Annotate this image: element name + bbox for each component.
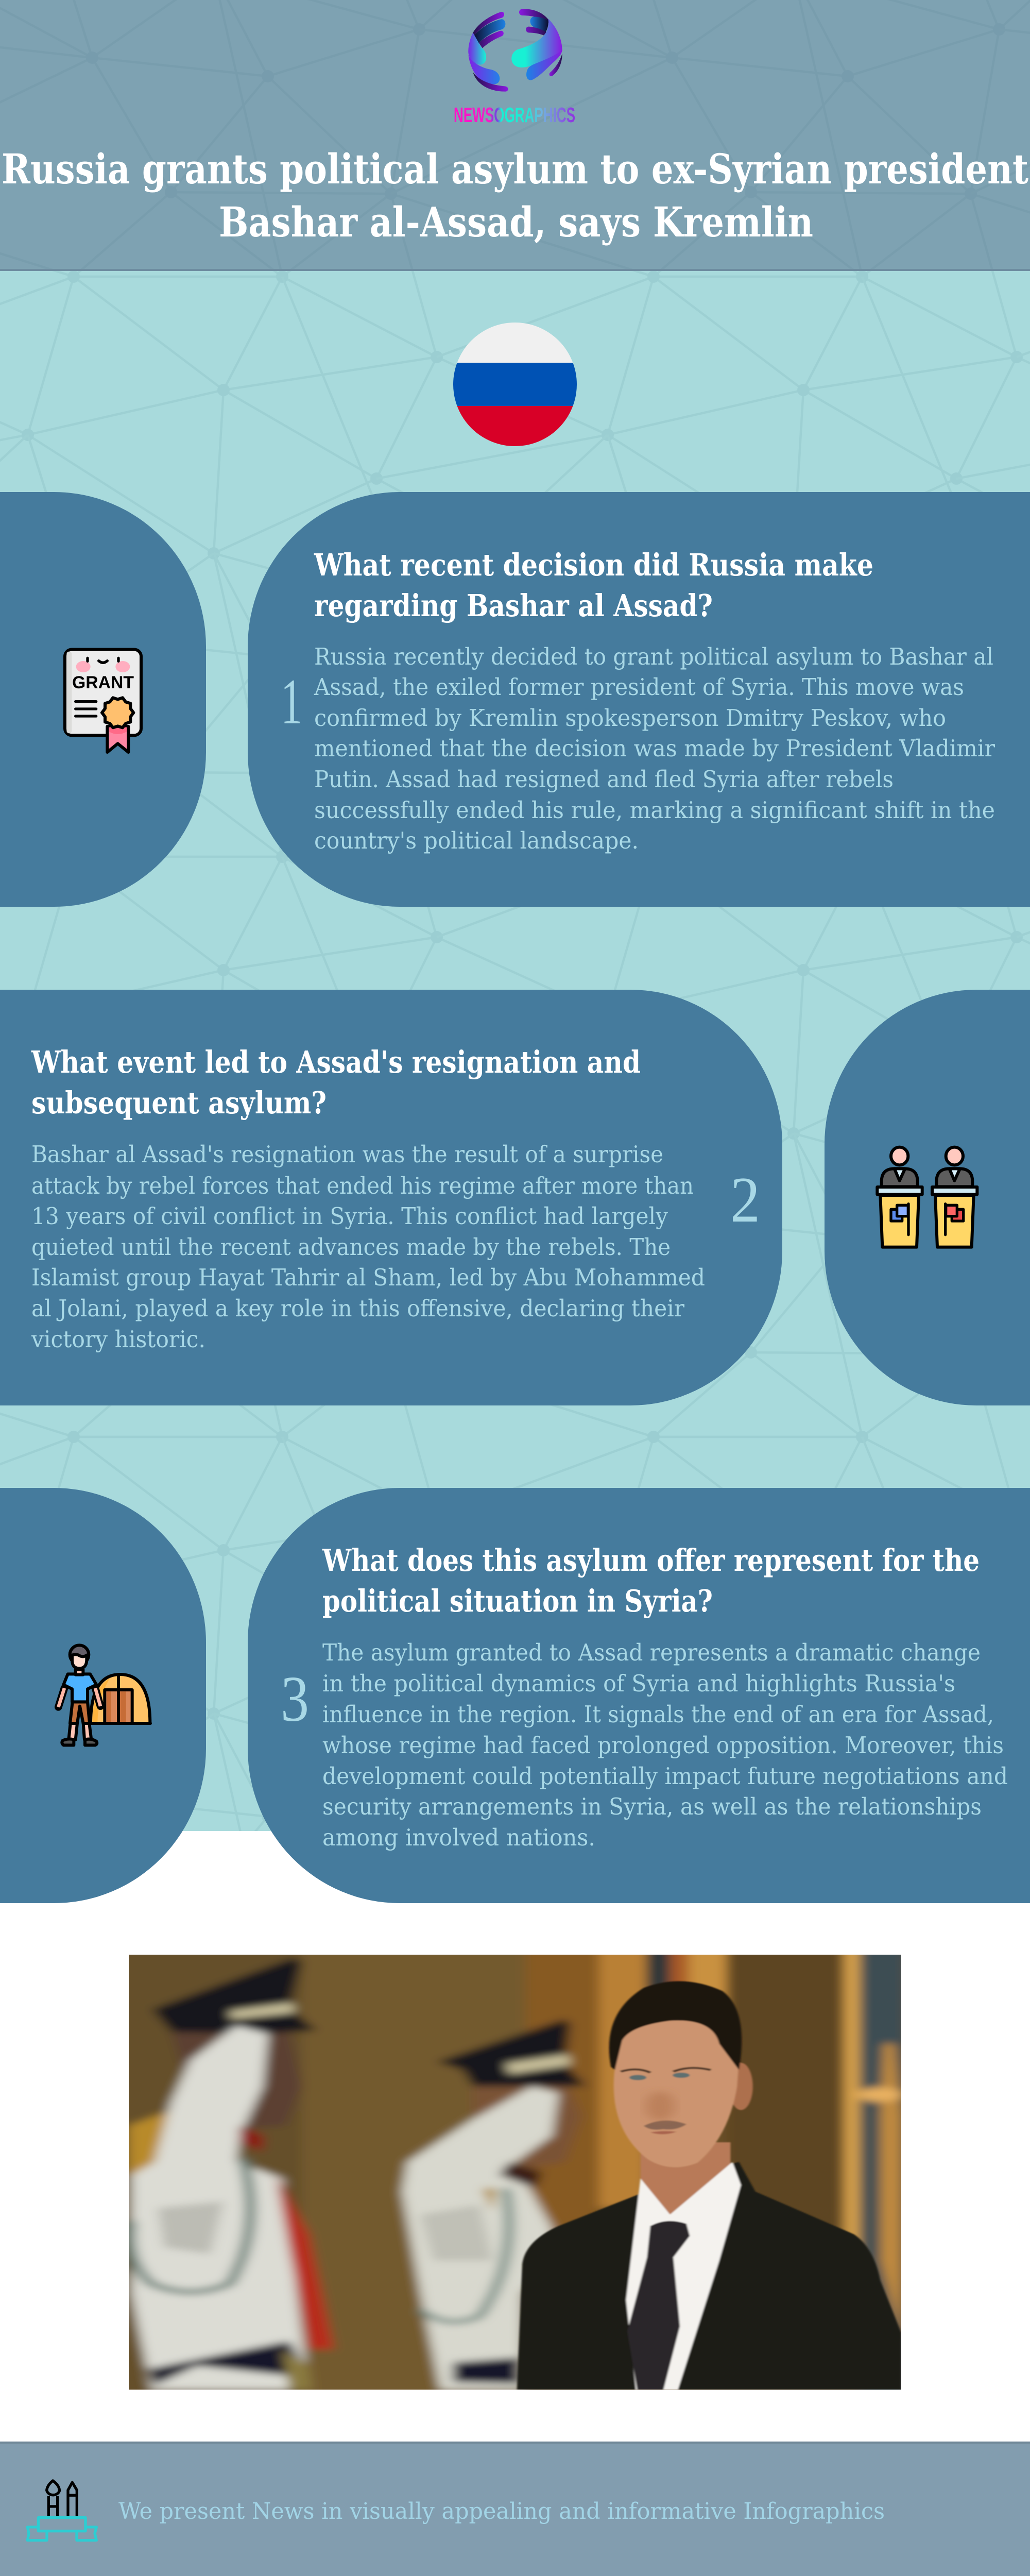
logo: top — [454, 9, 575, 127]
body text 2 — [31, 1141, 705, 1353]
body text 3: among involved nations. — [322, 1824, 595, 1851]
body text 3: whose regime had faced prolonged opposition. Moreover, this — [322, 1732, 1004, 1759]
number 3: 3 — [281, 1664, 309, 1735]
body text 1: confirmed by Kremlin spokesperson Dmitry Peskov, who — [314, 704, 946, 732]
heading 3: political situation in Syria? — [322, 1583, 713, 1619]
photo: Assad with saluting guards — [129, 1955, 901, 2389]
icon: grant certificate: GRANT — [72, 673, 134, 692]
panel: question 2 — [0, 990, 1030, 1405]
text panel 3 — [248, 1488, 1030, 1903]
icon: two debaters at podiums — [877, 1147, 977, 1247]
body text 3: security arrangements in Syria, as well as the relationships — [322, 1793, 982, 1820]
footer band — [0, 2442, 1030, 2576]
body text 2: 13 years of civil conflict in Syria. This conflict had largely — [31, 1202, 668, 1230]
ear — [729, 2063, 753, 2110]
teal network pattern background — [0, 0, 1030, 1831]
body text 1 — [314, 643, 995, 854]
icon: grant certificate — [65, 650, 141, 752]
body text 3: development could potentially impact future negotiations and — [322, 1762, 1008, 1790]
body text 2: Bashar al Assad's resignation was the result of a surprise — [31, 1141, 663, 1168]
body text 2: Islamist group Hayat Tahrir al Sham, led by Abu Mohammed — [31, 1264, 705, 1291]
icon: brush and pencil on banner — [27, 2481, 96, 2540]
number 2: 2 — [730, 1164, 760, 1236]
body text 3: The asylum granted to Assad represents a dramatic change — [322, 1639, 981, 1666]
heading 2: subsequent asylum? — [31, 1085, 327, 1121]
title — [2, 145, 1028, 246]
body text 1: successfully ended his rule, marking a significant shift in the — [314, 796, 995, 824]
soldier 2 blurred — [525, 2083, 580, 2169]
body text 1: Russia recently decided to grant political asylum to Bashar al — [314, 643, 993, 670]
body text 2: attack by rebel forces that ended his regime after more than — [31, 1172, 694, 1199]
icon panel 3 — [0, 1488, 206, 1903]
number 1: 1 — [281, 666, 302, 738]
icon panel 1 — [0, 492, 206, 907]
body text 2: quieted until the recent advances made by the rebels. The — [31, 1233, 671, 1261]
mustache — [644, 2121, 686, 2130]
neck — [641, 2142, 730, 2221]
logo: top: NEWSOGRAPHICS — [454, 103, 575, 127]
body text 3 — [322, 1639, 1008, 1851]
shirt — [626, 2162, 741, 2389]
tie — [627, 2221, 690, 2389]
text panel 2 — [0, 990, 782, 1405]
hair — [609, 1981, 742, 2070]
body text 3: in the political dynamics of Syria and highlights Russia's — [322, 1670, 955, 1697]
suit — [517, 2162, 901, 2389]
header band — [0, 0, 1030, 271]
icon: Russian flag circle — [453, 323, 577, 446]
heading 1 — [314, 547, 873, 623]
icon: refugee and tent — [58, 1645, 150, 1745]
body text 1: Assad, the exiled former president of Syria. This move was — [314, 673, 964, 701]
panel: question 1 — [0, 492, 1030, 907]
eyes and brows — [621, 2068, 711, 2073]
body text 2: victory historic. — [31, 1326, 205, 1353]
face — [614, 2008, 741, 2167]
body text 1: mentioned that the decision was made by President Vladimir — [314, 735, 995, 762]
heading 1: regarding Bashar al Assad? — [314, 588, 713, 623]
heading 3 — [322, 1543, 980, 1619]
tagline: We present News in visually appealing and informative Infographics — [118, 2498, 885, 2524]
title: Bashar al-Assad, says Kremlin — [219, 198, 813, 246]
body text 1: Putin. Assad had resigned and fled Syria after rebels — [314, 766, 894, 793]
body text 1: country's political landscape. — [314, 827, 639, 854]
heading 1: What recent decision did Russia make — [314, 547, 873, 583]
heading 2 — [31, 1044, 641, 1121]
panel: question 3 — [0, 1488, 1030, 1903]
body text 2: al Jolani, played a key role in this offensive, declaring their — [31, 1295, 684, 1322]
facial shading — [646, 2091, 675, 2121]
heading 2: What event led to Assad's resignation and — [31, 1044, 641, 1080]
text panel 1 — [248, 492, 1030, 907]
body text 3: influence in the region. It signals the end of an era for Assad, — [322, 1701, 994, 1728]
icon panel 2 — [825, 990, 1030, 1405]
soldier 1 blurred — [129, 2111, 169, 2177]
